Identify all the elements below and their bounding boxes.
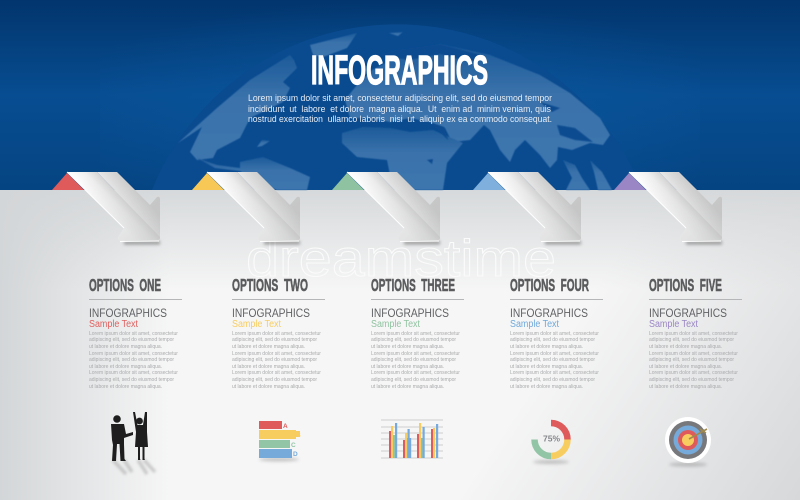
panel: lower background — [0, 190, 800, 500]
column: option two: Lorem ipsum dolor sit amet, consectetur — [232, 351, 321, 357]
icon: stacked labelled bars: B — [296, 432, 301, 439]
column: option two: ut labore et dolore magna aliqua. — [232, 344, 305, 350]
arrow five — [614, 172, 722, 244]
column: option four: ut labore et dolore magna aliqua. — [510, 384, 583, 390]
column: option five: Lorem ipsum dolor sit amet, consectetur — [649, 370, 738, 376]
column: option three: Lorem ipsum dolor sit amet, consectetur — [371, 351, 460, 357]
icon: 75% donut — [533, 423, 569, 464]
column: option five: ut labore et dolore magna aliqua. — [649, 384, 722, 390]
column: option one: Sample Text — [89, 319, 138, 330]
column: option three: adipiscing elit, sed do eiusmod tempor — [371, 377, 456, 383]
column: option one: adipiscing elit, sed do eiusmod tempor — [89, 337, 174, 343]
column: option two: adipiscing elit, sed do eiusmod tempor — [232, 357, 317, 363]
column: option one: Lorem ipsum dolor sit amet, consectetur — [89, 370, 178, 376]
column: option one — [89, 275, 182, 390]
column: option two: Lorem ipsum dolor sit amet, consectetur — [232, 370, 321, 376]
column: option five: Lorem ipsum dolor sit amet, consectetur — [649, 331, 738, 337]
column: option two: Lorem ipsum dolor sit amet, consectetur — [232, 331, 321, 337]
icon: stacked labelled bars — [259, 421, 301, 462]
column: option four: adipiscing elit, sed do eiusmod tempor — [510, 337, 595, 343]
column: option four: ut labore et dolore magna aliqua. — [510, 344, 583, 350]
column: option five: adipiscing elit, sed do eiusmod tempor — [649, 377, 734, 383]
column: option three: adipiscing elit, sed do eiusmod tempor — [371, 357, 456, 363]
icon: 75% donut: 75% — [543, 434, 560, 444]
column: option two: INFOGRAPHICS — [232, 306, 310, 320]
icon: stacked labelled bars: D — [293, 451, 298, 458]
column: option five: ut labore et dolore magna aliqua. — [649, 364, 722, 370]
column: option three: Lorem ipsum dolor sit amet, consectetur — [371, 370, 460, 376]
column: option three: OPTIONS THREE — [371, 275, 455, 295]
header paragraph: incididunt ut labore et dolore magna aliqua. Ut enim ad minim veniam, quis — [248, 104, 551, 115]
column: option three: ut labore et dolore magna aliqua. — [371, 344, 444, 350]
column: option one: OPTIONS ONE — [89, 275, 161, 295]
column: option four — [510, 275, 603, 390]
column: option four: ut labore et dolore magna aliqua. — [510, 364, 583, 370]
column: option five: OPTIONS FIVE — [649, 275, 722, 295]
arrow two — [192, 172, 300, 244]
column: option three: adipiscing elit, sed do eiusmod tempor — [371, 337, 456, 343]
column: option five: ut labore et dolore magna aliqua. — [649, 344, 722, 350]
icon: target — [665, 417, 711, 467]
column: option two: adipiscing elit, sed do eiusmod tempor — [232, 337, 317, 343]
column: option four: Lorem ipsum dolor sit amet, consectetur — [510, 331, 599, 337]
column: option five — [649, 275, 742, 390]
column: option one: ut labore et dolore magna aliqua. — [89, 384, 162, 390]
icon: business people — [111, 412, 155, 474]
column: option four: INFOGRAPHICS — [510, 306, 588, 320]
panel: blue header — [0, 0, 800, 190]
column: option three: Sample Text — [371, 319, 420, 330]
icon: stacked labelled bars: C — [291, 442, 296, 449]
column: option five: Sample Text — [649, 319, 698, 330]
column: option three: INFOGRAPHICS — [371, 306, 449, 320]
column: option two: OPTIONS TWO — [232, 275, 308, 295]
column: option four: adipiscing elit, sed do eiusmod tempor — [510, 377, 595, 383]
column: option five: INFOGRAPHICS — [649, 306, 727, 320]
column: option three — [371, 275, 464, 390]
column: option four: adipiscing elit, sed do eiusmod tempor — [510, 357, 595, 363]
column: option one: Lorem ipsum dolor sit amet, consectetur — [89, 351, 178, 357]
header paragraph — [248, 93, 552, 125]
woman — [133, 412, 148, 460]
column: option four: Lorem ipsum dolor sit amet, consectetur — [510, 370, 599, 376]
column: option one: ut labore et dolore magna aliqua. — [89, 364, 162, 370]
arrow three — [332, 172, 440, 244]
column: option one: Lorem ipsum dolor sit amet, consectetur — [89, 331, 178, 337]
column: option four: Sample Text — [510, 319, 559, 330]
column: option five: adipiscing elit, sed do eiusmod tempor — [649, 337, 734, 343]
header paragraph: Lorem ipsum dolor sit amet, consectetur adipiscing elit, sed do eiusmod tempor — [248, 93, 552, 104]
column: option three: ut labore et dolore magna aliqua. — [371, 364, 444, 370]
column: option one: INFOGRAPHICS — [89, 306, 167, 320]
icon: stacked labelled bars: A — [283, 423, 288, 430]
column: option two: ut labore et dolore magna aliqua. — [232, 364, 305, 370]
arrow four — [473, 172, 581, 244]
column: option one: adipiscing elit, sed do eiusmod tempor — [89, 377, 174, 383]
column: option four: Lorem ipsum dolor sit amet, consectetur — [510, 351, 599, 357]
column: option two: Sample Text — [232, 319, 281, 330]
globe — [152, 24, 642, 190]
arrow one — [52, 172, 160, 244]
column: option two: adipiscing elit, sed do eiusmod tempor — [232, 377, 317, 383]
column: option five: Lorem ipsum dolor sit amet, consectetur — [649, 351, 738, 357]
icon: bar chart — [381, 420, 443, 458]
header paragraph: nostrud exercitation ullamco laboris nisi ut aliquip ex ea commodo consequat. — [248, 114, 552, 125]
column: option three: ut labore et dolore magna aliqua. — [371, 384, 444, 390]
watermark: dreamstime — [246, 230, 556, 288]
column: option five: adipiscing elit, sed do eiusmod tempor — [649, 357, 734, 363]
column: option two: ut labore et dolore magna aliqua. — [232, 384, 305, 390]
column: option four: OPTIONS FOUR — [510, 275, 589, 295]
man — [111, 415, 133, 461]
column: option three: Lorem ipsum dolor sit amet, consectetur — [371, 331, 460, 337]
column: option two — [232, 275, 325, 390]
column: option one: ut labore et dolore magna aliqua. — [89, 344, 162, 350]
title: INFOGRAPHICS — [311, 47, 488, 93]
column: option one: adipiscing elit, sed do eiusmod tempor — [89, 357, 174, 363]
